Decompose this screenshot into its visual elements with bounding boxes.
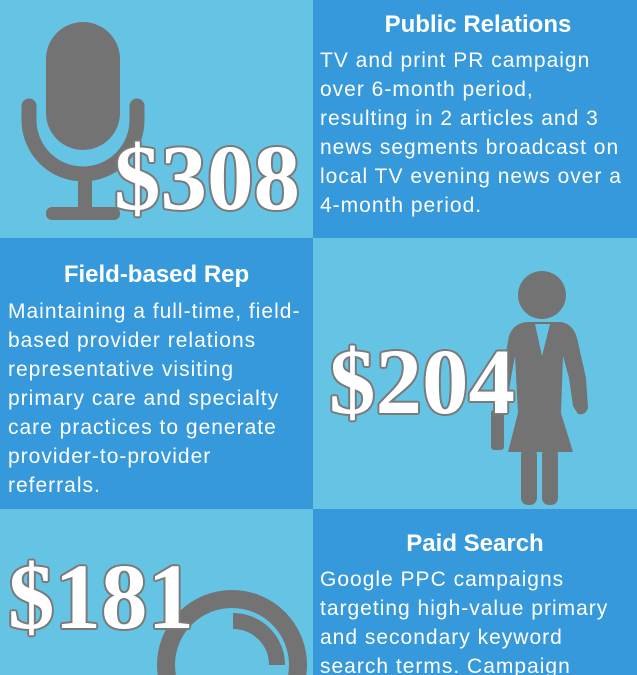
icon: ring chart bbox=[157, 590, 307, 675]
panel: public relations icon bbox=[0, 0, 313, 238]
body text: news segments broadcast on bbox=[320, 136, 619, 159]
body text: resulting in 2 articles and 3 bbox=[320, 107, 599, 130]
body text bbox=[320, 568, 608, 675]
panel: public relations text bbox=[313, 0, 637, 238]
body text: 4-month period. bbox=[320, 194, 482, 217]
number: $204: $204 bbox=[329, 331, 515, 434]
icon: businesswoman bbox=[491, 271, 588, 505]
panel: paid search icon bbox=[0, 509, 313, 675]
heading: Paid Search bbox=[406, 530, 544, 557]
panel: field-based rep text bbox=[0, 238, 313, 509]
body text: Google PPC campaigns bbox=[320, 568, 564, 591]
heading: Public Relations bbox=[385, 11, 571, 38]
body text: targeting high-value primary bbox=[320, 597, 608, 620]
body text: over 6-month period, bbox=[320, 78, 534, 101]
body text bbox=[8, 300, 300, 497]
body text: provider-to-provider bbox=[8, 445, 211, 468]
heading: Field-based Rep bbox=[64, 261, 249, 288]
body text: care practices to generate bbox=[8, 416, 277, 439]
panel: field-based rep icon bbox=[313, 238, 637, 509]
body text: primary care and specialty bbox=[8, 387, 279, 410]
icon: microphone bbox=[22, 22, 144, 220]
body text: representative visiting bbox=[8, 358, 234, 381]
body text: Maintaining a full-time, field- bbox=[8, 300, 300, 323]
body text bbox=[320, 49, 622, 217]
panel: paid search text bbox=[313, 509, 637, 675]
body text: local TV evening news over a bbox=[320, 165, 622, 188]
number: $308: $308 bbox=[114, 127, 300, 230]
body text: TV and print PR campaign bbox=[320, 49, 590, 72]
body text: and secondary keyword bbox=[320, 626, 563, 649]
body text: referrals. bbox=[8, 474, 101, 497]
body text: based provider relations bbox=[8, 329, 256, 352]
number: $181: $181 bbox=[8, 546, 194, 649]
